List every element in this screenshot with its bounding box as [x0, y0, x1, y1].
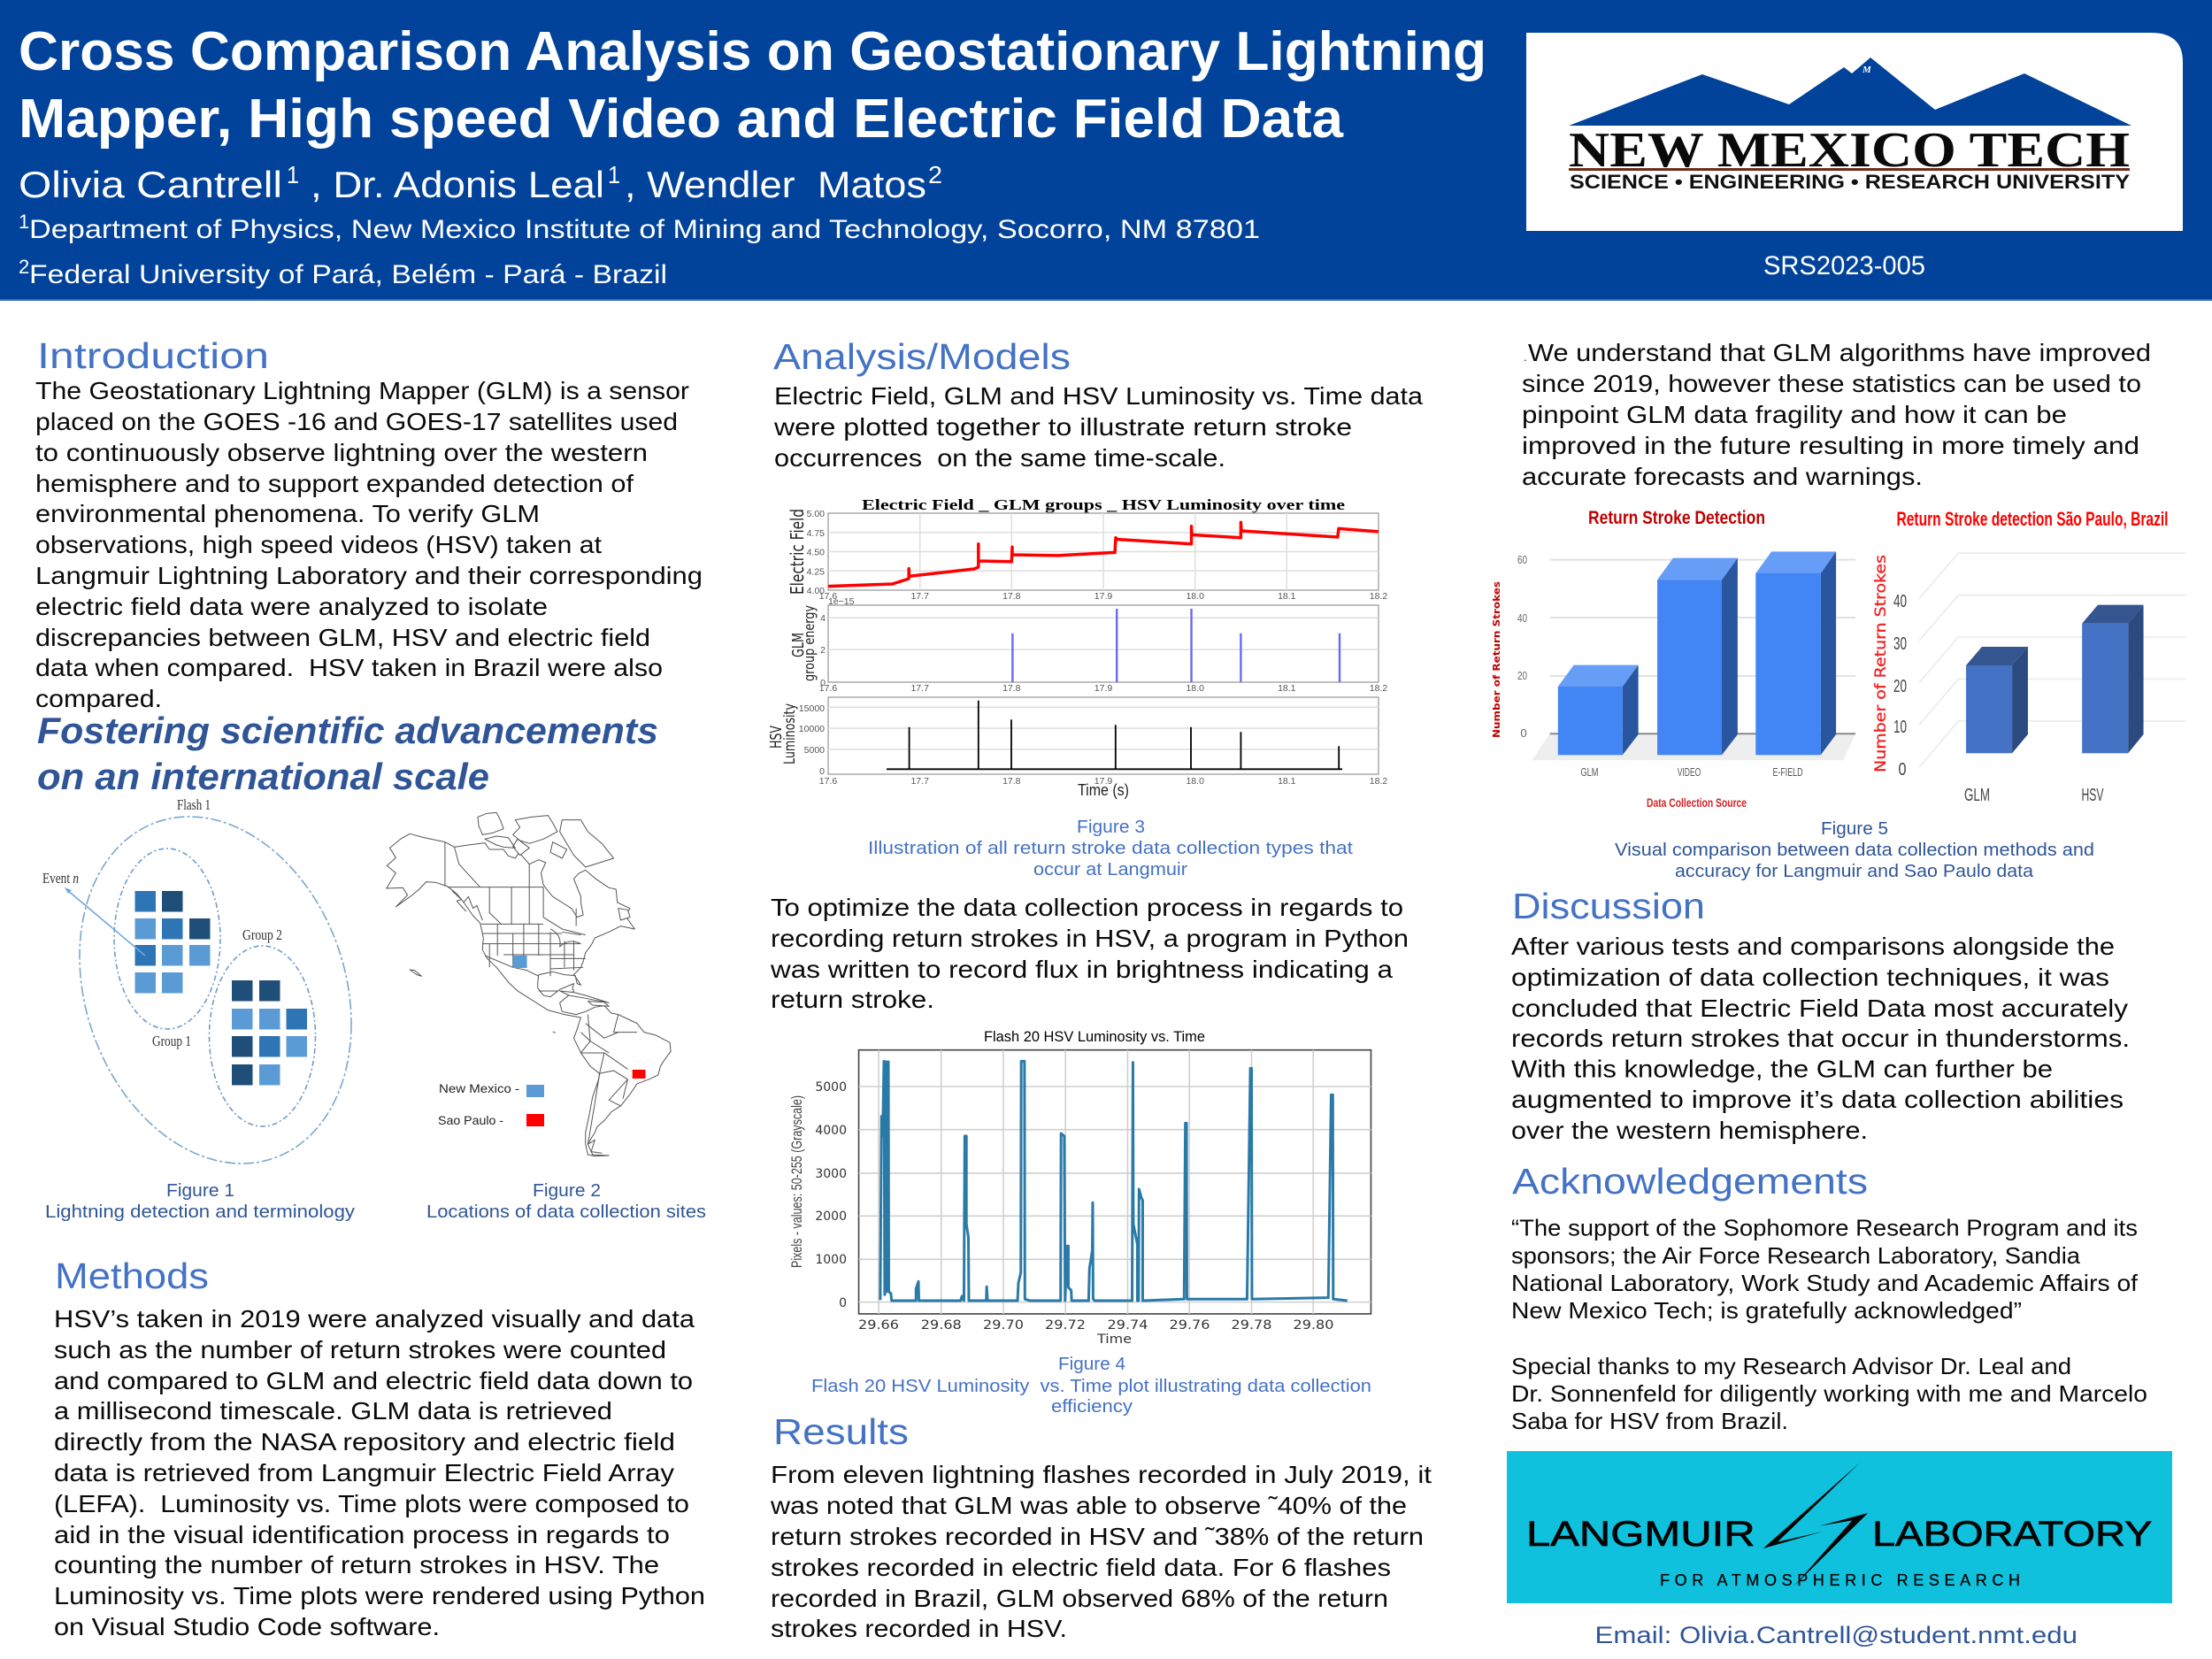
- text block: results: return strokes recorded in HSV and ˜38% of the return: [771, 1523, 1424, 1550]
- figure 4: Flash 20 HSV luminosity line chart: 29.76: [1170, 1318, 1210, 1333]
- map legend: Sao Paulo -: [438, 1113, 503, 1127]
- group 2 event squares: [232, 980, 307, 1085]
- HSV luminosity panel: 15000: [799, 703, 825, 714]
- GLM group energy panel: 4: [820, 613, 826, 624]
- text block: discussion: After various tests and comparisons alongside the: [1511, 933, 2115, 960]
- map legend: New Mexico -: [439, 1081, 519, 1095]
- figure 5 left: return stroke detection bar chart: 40: [1517, 611, 1527, 625]
- figure 5 left: return stroke detection bar chart: 60: [1517, 553, 1527, 566]
- electric field panel: 5.00: [807, 509, 825, 519]
- figure 5 left: return stroke detection bar chart: E-FIELD: [1773, 765, 1803, 779]
- GLM group energy panel: 2: [820, 645, 826, 656]
- figure 4: Flash 20 HSV luminosity line chart: 4000: [815, 1124, 847, 1138]
- logo: New Mexico Tech: [1526, 33, 2183, 231]
- HSV luminosity panel: 17.7: [910, 776, 929, 787]
- electric field panel: Electric Field: [787, 509, 808, 595]
- caption: figure 3: Figure 3: [1077, 818, 1145, 837]
- text block: GLM algorithm note: [1522, 339, 2151, 490]
- text block: results: [770, 1461, 1432, 1642]
- text block: methods: a millisecond timescale. GLM data is retrieved: [54, 1397, 612, 1425]
- electric field panel: 4.00: [807, 586, 825, 596]
- figure 5 right: Sao Paulo return stroke bar chart: 40: [1893, 592, 1907, 611]
- electric field panel: 18.0: [1186, 591, 1204, 602]
- figure 5 left: return stroke detection bar chart: 20: [1517, 669, 1527, 682]
- text block: methods: on Visual Studio Code software.: [54, 1613, 440, 1640]
- figure 2: map of the Americas with data collection sites: [387, 812, 671, 1156]
- text block: acknowledgements: National Laboratory, Work Study and Academic Affairs of: [1511, 1270, 2139, 1296]
- figure 1: lightning terminology diagram: Event n: [42, 870, 79, 887]
- GLM group energy panel: 0: [820, 678, 826, 688]
- HSV luminosity panel: 0: [819, 766, 825, 777]
- subheading: Fostering scientific advancements: on an international scale: [37, 756, 489, 797]
- figure 4: Flash 20 HSV luminosity line chart: [788, 1028, 1371, 1347]
- text block: GLM algorithm note: improved in the future resulting in more timely and: [1522, 432, 2139, 459]
- text block: acknowledgements: sponsors; the Air Force Research Laboratory, Sandia: [1511, 1242, 2081, 1269]
- text block: introduction: to continuously observe lightning over the western: [35, 439, 648, 466]
- text block: results: recorded in Brazil, GLM observed 68% of the return: [771, 1585, 1388, 1612]
- heading: Results: Results: [773, 1411, 909, 1452]
- text block: optimization: To optimize the data collection process in regards to: [771, 894, 1403, 921]
- header banner: [0, 0, 2212, 301]
- authors: , Wendler Matos: [625, 164, 926, 205]
- text block: discussion: augmented to improve it’s data collection abilities: [1511, 1086, 2124, 1113]
- figure 5 left: return stroke detection bar chart: Data Collection Source: [1647, 795, 1747, 810]
- text block: GLM algorithm note: .: [1524, 350, 1527, 364]
- HSV luminosity panel: 17.9: [1094, 776, 1112, 787]
- subheading: Fostering scientific advancements: [37, 710, 658, 797]
- figure 4: Flash 20 HSV luminosity line chart: Pixels - values: 50-255 (Grayscale): [788, 1095, 805, 1268]
- text block: discussion: [1511, 933, 2130, 1144]
- poster id: SRS2023-005: [1763, 251, 1925, 280]
- subheading: Fostering scientific advancements: Fostering scientific advancements: [37, 710, 658, 751]
- GLM group energy panel: GLM: [789, 633, 808, 657]
- caption: figure 3: [868, 818, 1353, 879]
- figure 4: Flash 20 HSV luminosity line chart: 29.78: [1232, 1318, 1272, 1333]
- figure 4: Flash 20 HSV luminosity line chart: 29.68: [921, 1318, 962, 1333]
- GLM group energy panel: 18.1: [1278, 683, 1296, 694]
- caption: figure 2: Locations of data collection sites: [426, 1202, 706, 1222]
- text block: introduction: environmental phenomena. To verify GLM: [35, 500, 540, 527]
- poster title: Cross Comparison Analysis on Geostationary Lightning: [19, 21, 1486, 82]
- caption: figure 5: [1615, 819, 2094, 881]
- heading: Methods: Methods: [55, 1256, 209, 1296]
- figure 5 right: Sao Paulo return stroke bar chart: 0: [1899, 760, 1906, 780]
- text block: methods: HSV’s taken in 2019 were analyzed visually and data: [54, 1305, 695, 1333]
- authors: [19, 161, 942, 205]
- text block: discussion: concluded that Electric Field Data most accurately: [1511, 995, 2128, 1022]
- logo: Langmuir Laboratory: FOR ATMOSPHERIC RESEARCH: [1660, 1571, 2020, 1589]
- GLM group energy panel: 18.0: [1186, 683, 1204, 694]
- caption: figure 3: occur at Langmuir: [1033, 860, 1187, 879]
- text block: discussion: optimization of data collection techniques, it was: [1511, 964, 2109, 991]
- HSV luminosity panel: 17.6: [819, 776, 837, 787]
- text block: introduction: Langmuir Lightning Laboratory and their corresponding: [35, 562, 703, 589]
- figure 5 left: return stroke detection bar chart: 0: [1520, 726, 1527, 740]
- authors: 1: [287, 161, 299, 188]
- electric field panel: 17.6: [819, 591, 837, 602]
- text block: GLM algorithm note: pinpoint GLM data fragility and how it can be: [1522, 401, 2067, 428]
- figure 4: Flash 20 HSV luminosity line chart: 1000: [815, 1253, 847, 1267]
- figure 4: Flash 20 HSV luminosity line chart: 0: [839, 1296, 847, 1310]
- text block: methods: counting the number of return strokes in HSV. The: [54, 1551, 659, 1578]
- text block: introduction: data when compared. HSV taken in Brazil were also: [35, 654, 663, 681]
- text block: GLM algorithm note: accurate forecasts and warnings.: [1522, 463, 1923, 490]
- figure 5 right: Sao Paulo return stroke bar chart: 20: [1893, 677, 1907, 696]
- logo: New Mexico Tech: SCIENCE • ENGINEERING • RESEARCH UNIVERSITY: [1570, 171, 2130, 193]
- text block: introduction: compared.: [35, 685, 162, 712]
- GLM group energy panel: 17.6: [819, 683, 837, 694]
- text block: analysis: were plotted together to illustrate return stroke: [773, 413, 1352, 441]
- figure 4: Flash 20 HSV luminosity line chart: Flash 20 HSV Luminosity vs. Time: [984, 1028, 1205, 1045]
- figure 4: Flash 20 HSV luminosity line chart: Time: [1096, 1333, 1132, 1347]
- electric field panel: 4.50: [807, 547, 825, 557]
- heading: Discussion: Discussion: [1512, 886, 1705, 926]
- figure 3: electric field, GLM, HSV time series: [767, 496, 1387, 799]
- HSV luminosity panel: Time (s): [1078, 781, 1129, 799]
- caption: figure 2: [426, 1181, 706, 1222]
- GLM group energy panel: 17.9: [1094, 683, 1112, 694]
- poster title: [19, 21, 1486, 150]
- text block: acknowledgements: Dr. Sonnenfeld for diligently working with me and Marcelo: [1511, 1380, 2147, 1407]
- GLM group energy panel: 18.2: [1370, 683, 1387, 694]
- text block: introduction: electric field data were analyzed to isolate: [35, 593, 548, 620]
- caption: figure 4: [811, 1355, 1371, 1417]
- electric field panel: 18.2: [1370, 591, 1387, 602]
- text block: methods: [54, 1305, 705, 1640]
- text block: discussion: With this knowledge, the GLM can further be: [1511, 1055, 2053, 1083]
- figure 5 left: return stroke detection bar chart: Return Stroke Detection: [1588, 508, 1765, 528]
- caption: figure 4: Figure 4: [1058, 1355, 1125, 1374]
- figure 4: Flash 20 HSV luminosity line chart: 29.70: [983, 1318, 1024, 1333]
- text block: introduction: placed on the GOES -16 and GOES-17 satellites used: [35, 408, 678, 435]
- figure 5 left: return stroke detection bar chart: VIDEO: [1678, 765, 1701, 779]
- text block: methods: aid in the visual identification process in regards to: [54, 1521, 670, 1548]
- text block: introduction: hemisphere and to support expanded detection of: [35, 470, 634, 497]
- authors: Olivia Cantrell: [19, 164, 282, 205]
- figure 3: electric field, GLM, HSV time series: Electric Field _ GLM groups _ HSV Luminosity over time: [862, 496, 1346, 513]
- caption: figure 1: Lightning detection and terminology: [45, 1202, 355, 1222]
- text block: acknowledgements: Saba for HSV from Brazil.: [1511, 1408, 1788, 1434]
- HSV luminosity panel: 18.1: [1278, 776, 1296, 787]
- GLM group energy panel: group energy: [801, 605, 818, 681]
- text block: optimization: return stroke.: [771, 986, 934, 1013]
- authors: 1: [608, 161, 620, 188]
- map legend: [438, 1081, 544, 1127]
- text block: methods: and compared to GLM and electric field data down to: [54, 1367, 693, 1394]
- text block: acknowledgements: Special thanks to my Research Advisor Dr. Leal and: [1511, 1353, 2071, 1379]
- affiliations: Federal University of Pará, Belém - Pará - Brazil: [29, 260, 667, 289]
- figure 5 right: Sao Paulo return stroke bar chart: [1872, 508, 2185, 805]
- HSV luminosity panel: 10000: [799, 724, 825, 734]
- figure 4: Flash 20 HSV luminosity line chart: 5000: [815, 1080, 847, 1094]
- figure 1: lightning terminology diagram: Group 1: [152, 1033, 191, 1049]
- HSV luminosity panel: 18.0: [1186, 776, 1204, 787]
- text block: acknowledgements: “The support of the Sophomore Research Program and its: [1511, 1215, 2138, 1241]
- GLM group energy panel: [789, 596, 1387, 694]
- HSV luminosity panel: HSV: [767, 726, 786, 749]
- icon: lightning bolt: [1763, 1463, 1868, 1586]
- figure 4: Flash 20 HSV luminosity line chart: 3000: [815, 1167, 847, 1181]
- affiliations: 1: [19, 211, 29, 233]
- text block: GLM algorithm note: We understand that GLM algorithms have improved: [1528, 339, 2151, 366]
- logo: New Mexico Tech: NEW MEXICO TECH: [1569, 123, 2130, 178]
- electric field panel: 4.25: [807, 566, 825, 577]
- electric field panel: 17.8: [1002, 591, 1021, 602]
- text block: analysis: [773, 382, 1423, 472]
- text block: introduction: The Geostationary Lightning Mapper (GLM) is a sensor: [35, 377, 689, 404]
- GLM group energy panel: 17.8: [1002, 683, 1021, 694]
- text block: introduction: discrepancies between GLM, HSV and electric field: [35, 624, 650, 651]
- HSV luminosity panel: [767, 697, 1387, 799]
- HSV luminosity panel: 17.8: [1002, 776, 1021, 787]
- logo: New Mexico Tech: M: [1862, 65, 1872, 75]
- figure 4: Flash 20 HSV luminosity line chart: 29.74: [1108, 1318, 1148, 1333]
- caption: figure 2: Figure 2: [533, 1181, 601, 1201]
- affiliations: 2: [19, 256, 29, 278]
- affiliations: [19, 211, 1260, 289]
- GLM group energy panel: 17.7: [910, 683, 929, 694]
- authors: 2: [928, 161, 942, 188]
- figure 5 left: return stroke detection bar chart: Number of Return Strokes: [1491, 581, 1502, 738]
- caption: figure 4: Flash 20 HSV Luminosity vs. Time plot illustrating data collection: [811, 1377, 1371, 1396]
- figure 1: lightning terminology diagram: [42, 787, 351, 1194]
- text block: results: strokes recorded in HSV.: [771, 1615, 1067, 1642]
- HSV luminosity panel: 5000: [804, 745, 825, 756]
- text block: results: From eleven lightning flashes recorded in July 2019, it: [771, 1461, 1432, 1488]
- text block: introduction: observations, high speed videos (HSV) taken at: [35, 531, 602, 558]
- text block: results: strokes recorded in electric field data. For 6 flashes: [771, 1554, 1391, 1581]
- caption: figure 1: Figure 1: [166, 1181, 234, 1201]
- text block: acknowledgements: [1511, 1215, 2147, 1434]
- text block: discussion: over the western hemisphere.: [1511, 1117, 1868, 1144]
- text block: methods: such as the number of return strokes were counted: [54, 1336, 666, 1363]
- figure 4: Flash 20 HSV luminosity line chart: 29.66: [858, 1318, 899, 1333]
- figure 1: lightning terminology diagram: Group 2: [242, 926, 282, 943]
- figure 4: Flash 20 HSV luminosity line chart: 29.80: [1294, 1318, 1334, 1333]
- HSV luminosity panel: 18.2: [1370, 776, 1387, 787]
- figure 5 right: Sao Paulo return stroke bar chart: HSV: [2081, 786, 2104, 805]
- GLM group energy panel: 1e−15: [828, 596, 855, 607]
- text block: methods: directly from the NASA repository and electric field: [54, 1428, 675, 1455]
- group 1 event squares: [134, 891, 211, 993]
- text block: analysis: occurrences on the same time-scale.: [774, 444, 1225, 472]
- authors: , Dr. Adonis Leal: [311, 164, 604, 205]
- logo: Langmuir Laboratory: LABORATORY: [1872, 1515, 2152, 1554]
- HSV luminosity panel: Luminosity: [781, 703, 799, 764]
- text block: acknowledgements: New Mexico Tech; is gratefully acknowledged”: [1511, 1297, 2022, 1324]
- figure 5 left: return stroke detection bar chart: GLM: [1580, 765, 1598, 779]
- caption: figure 5: Visual comparison between data collection methods and: [1615, 841, 2094, 860]
- electric field panel: 17.7: [910, 591, 929, 602]
- figure 4: Flash 20 HSV luminosity line chart: 29.72: [1045, 1318, 1086, 1333]
- text block: discussion: records return strokes that occur in thunderstorms.: [1511, 1025, 2130, 1052]
- text block: GLM algorithm note: since 2019, however these statistics can be used to: [1522, 370, 2141, 397]
- text block: optimization: recording return strokes in HSV, a program in Python: [771, 925, 1409, 952]
- text block: methods: data is retrieved from Langmuir Electric Field Array: [54, 1459, 674, 1486]
- text block: methods: Luminosity vs. Time plots were rendered using Python: [54, 1582, 705, 1609]
- contact email: Email: Olivia.Cantrell@student.nmt.edu: [1594, 1622, 2078, 1648]
- electric field panel: 17.9: [1094, 591, 1112, 602]
- logo: Langmuir Laboratory: [1507, 1451, 2172, 1603]
- heading: Acknowledgements: Acknowledgements: [1512, 1161, 1868, 1202]
- electric field panel: 18.1: [1278, 591, 1296, 602]
- text block: optimization: was written to record flux in brightness indicating a: [770, 956, 1393, 983]
- text block: methods: (LEFA). Luminosity vs. Time plots were composed to: [54, 1490, 689, 1517]
- caption: figure 1: [45, 1181, 355, 1222]
- caption: figure 5: Figure 5: [1821, 819, 1888, 839]
- caption: figure 5: accuracy for Langmuir and Sao Paulo data: [1675, 862, 2034, 881]
- text block: results: was noted that GLM was able to observe ˜40% of the: [770, 1492, 1407, 1519]
- figure 5 right: Sao Paulo return stroke bar chart: 30: [1893, 634, 1907, 654]
- figure 5 right: Sao Paulo return stroke bar chart: GLM: [1964, 786, 1990, 805]
- figure 4: Flash 20 HSV luminosity line chart: 2000: [815, 1210, 847, 1224]
- electric field panel: 4.75: [807, 528, 825, 539]
- figure 5 right: Sao Paulo return stroke bar chart: 10: [1893, 718, 1907, 737]
- text block: optimization: [770, 894, 1409, 1013]
- text block: analysis: Electric Field, GLM and HSV Luminosity vs. Time data: [774, 382, 1423, 410]
- figure 1: lightning terminology diagram: Flash 1: [177, 796, 211, 813]
- heading: Analysis/Models: Analysis/Models: [773, 336, 1071, 377]
- figure 5 left: return stroke detection bar chart: [1491, 508, 1855, 810]
- affiliations: Department of Physics, New Mexico Institute of Mining and Technology, Socorro, NM 87801: [29, 215, 1260, 244]
- caption: figure 3: Illustration of all return stroke data collection types that: [868, 839, 1353, 858]
- arrow: event n: [65, 887, 145, 956]
- caption: figure 4: efficiency: [1051, 1397, 1133, 1417]
- heading: Introduction: Introduction: [37, 335, 269, 376]
- logo: Langmuir Laboratory: LANGMUIR: [1526, 1515, 1755, 1554]
- poster title: Mapper, High speed Video and Electric Field Data: [19, 88, 1344, 150]
- electric field panel: [787, 509, 1387, 602]
- text block: introduction: [35, 377, 703, 712]
- figure 5 right: Sao Paulo return stroke bar chart: Number of Return Strokes: [1872, 555, 1890, 772]
